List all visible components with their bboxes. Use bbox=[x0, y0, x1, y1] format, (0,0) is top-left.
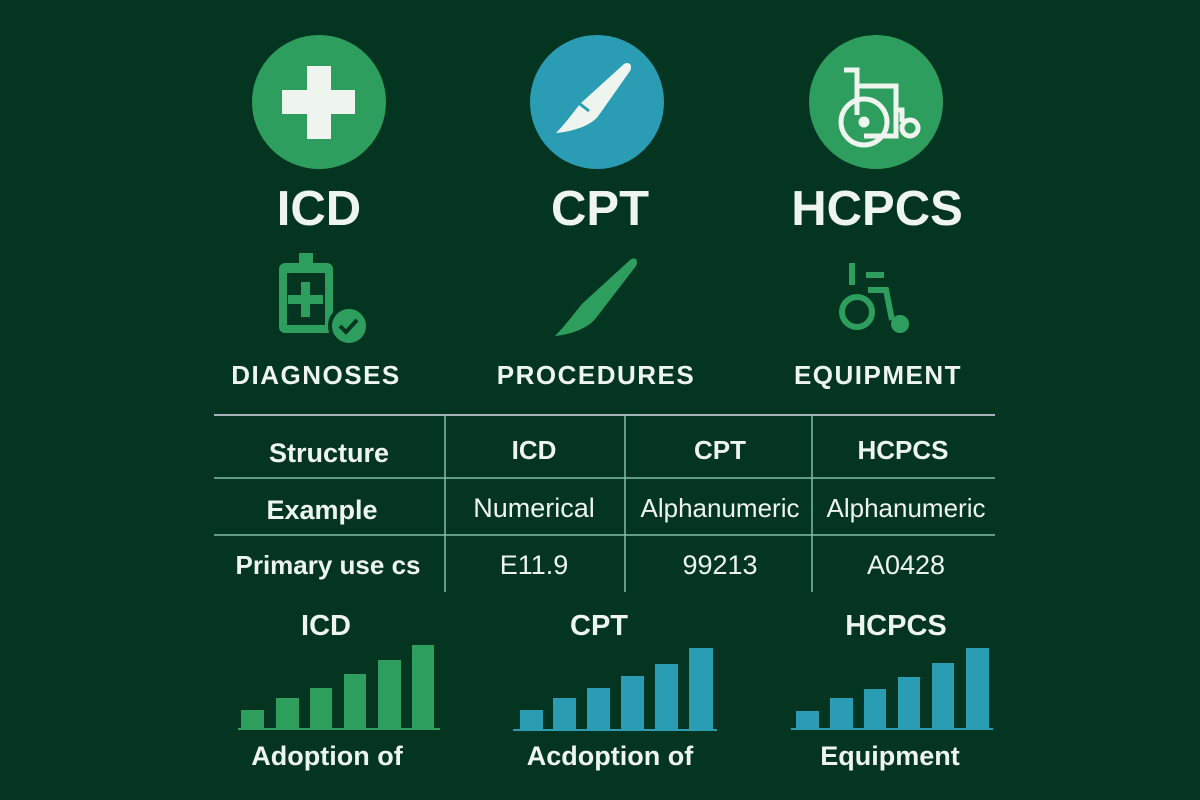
label: PROCEDURES: PROCEDURES bbox=[497, 360, 695, 390]
chart: CPT: Acdoption of bbox=[527, 741, 694, 771]
chart: HCPCS: Equipment bbox=[820, 741, 960, 771]
chart: CPT: CPT bbox=[570, 610, 628, 642]
icon: small scalpel bbox=[555, 258, 637, 336]
chart: CPT bbox=[513, 610, 717, 771]
label: DIAGNOSES: DIAGNOSES bbox=[231, 360, 401, 390]
icon: CPT scalpel circle bbox=[530, 35, 664, 169]
comparison table: Numerical bbox=[473, 493, 595, 523]
comparison table: A0428 bbox=[867, 550, 945, 580]
chart: ICD: ICD bbox=[301, 610, 351, 642]
comparison table: Alphanumeric bbox=[641, 493, 799, 523]
heading: HCPCS: HCPCS bbox=[791, 182, 963, 236]
chart: ICD bbox=[238, 610, 440, 771]
heading: CPT: CPT bbox=[551, 182, 649, 236]
icon: ICD cross circle bbox=[252, 35, 386, 169]
icon: HCPCS wheelchair circle bbox=[809, 35, 943, 169]
chart: HCPCS: HCPCS bbox=[845, 610, 947, 642]
icon: clipboard bbox=[279, 253, 368, 345]
chart: HCPCS bbox=[791, 610, 993, 771]
comparison table: Structure bbox=[269, 438, 389, 468]
comparison table: CPT bbox=[694, 435, 746, 465]
comparison table: Alphanumeric bbox=[827, 493, 985, 523]
comparison table: 99213 bbox=[682, 550, 758, 580]
comparison table bbox=[214, 415, 995, 592]
heading: ICD: ICD bbox=[277, 182, 361, 236]
comparison table: Example bbox=[266, 495, 378, 525]
comparison table: Primary use cs bbox=[235, 550, 421, 580]
icon: small wheelchair bbox=[842, 263, 906, 330]
chart: ICD: Adoption of bbox=[251, 741, 404, 771]
comparison table: ICD bbox=[512, 435, 556, 465]
label: EQUIPMENT: EQUIPMENT bbox=[794, 360, 962, 390]
comparison table: E11.9 bbox=[500, 550, 568, 580]
comparison table: HCPCS bbox=[857, 435, 949, 465]
